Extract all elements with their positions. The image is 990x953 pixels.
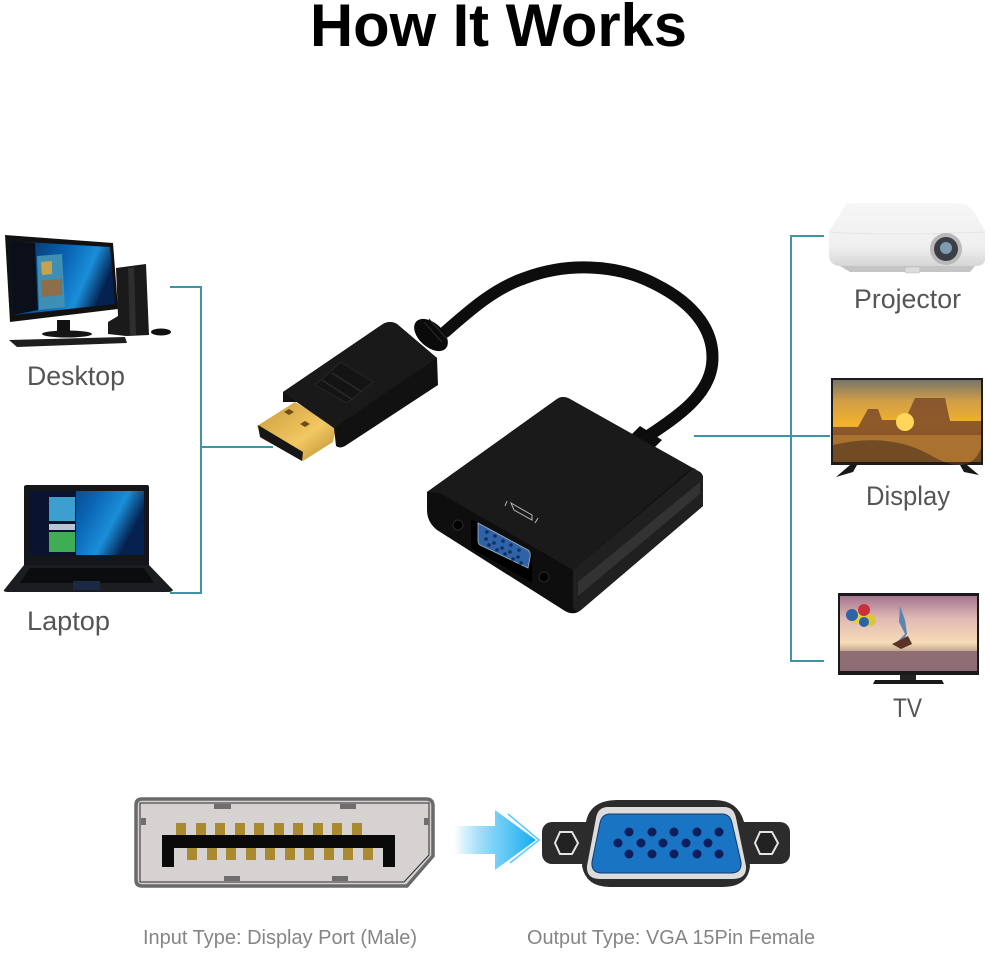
VGA pins — [614, 828, 724, 858]
lower pins — [187, 848, 373, 860]
cable — [445, 267, 712, 436]
connector lines: sources — [170, 287, 273, 593]
diagram: DisplayPort connector — [136, 799, 433, 886]
strain relief at plug — [408, 313, 454, 357]
icon: TV — [838, 593, 979, 684]
monitor symbol — [505, 501, 538, 523]
connector lines: outputs — [694, 236, 830, 661]
upper pins — [176, 823, 362, 835]
label: Desktop: Desktop — [27, 361, 125, 391]
port notches — [141, 804, 429, 881]
caption: output type: Output Type: VGA 15Pin Female — [527, 927, 815, 949]
label: Projector: Projector — [854, 284, 961, 314]
port bar — [162, 835, 395, 867]
cable strain relief at adapter — [632, 426, 662, 450]
diagram: VGA connector — [542, 800, 790, 887]
label: Laptop: Laptop — [27, 606, 110, 636]
caption: input type: Input Type: Display Port (Male) — [143, 927, 417, 949]
icon: desktop computer — [5, 235, 171, 347]
gold DisplayPort plug — [257, 402, 336, 461]
VGA adapter body — [427, 397, 703, 613]
icon: laptop — [4, 485, 173, 592]
label: TV: TV — [893, 693, 922, 723]
VGA port — [471, 519, 532, 583]
label: Display: Display — [866, 481, 950, 511]
hex nuts — [555, 832, 578, 854]
arrow — [454, 810, 539, 870]
plug housing — [283, 322, 438, 448]
adapter: DisplayPort to VGA cable — [257, 267, 712, 613]
icon: projector — [829, 203, 985, 273]
icon: display — [831, 378, 983, 477]
screw holes — [453, 520, 463, 530]
